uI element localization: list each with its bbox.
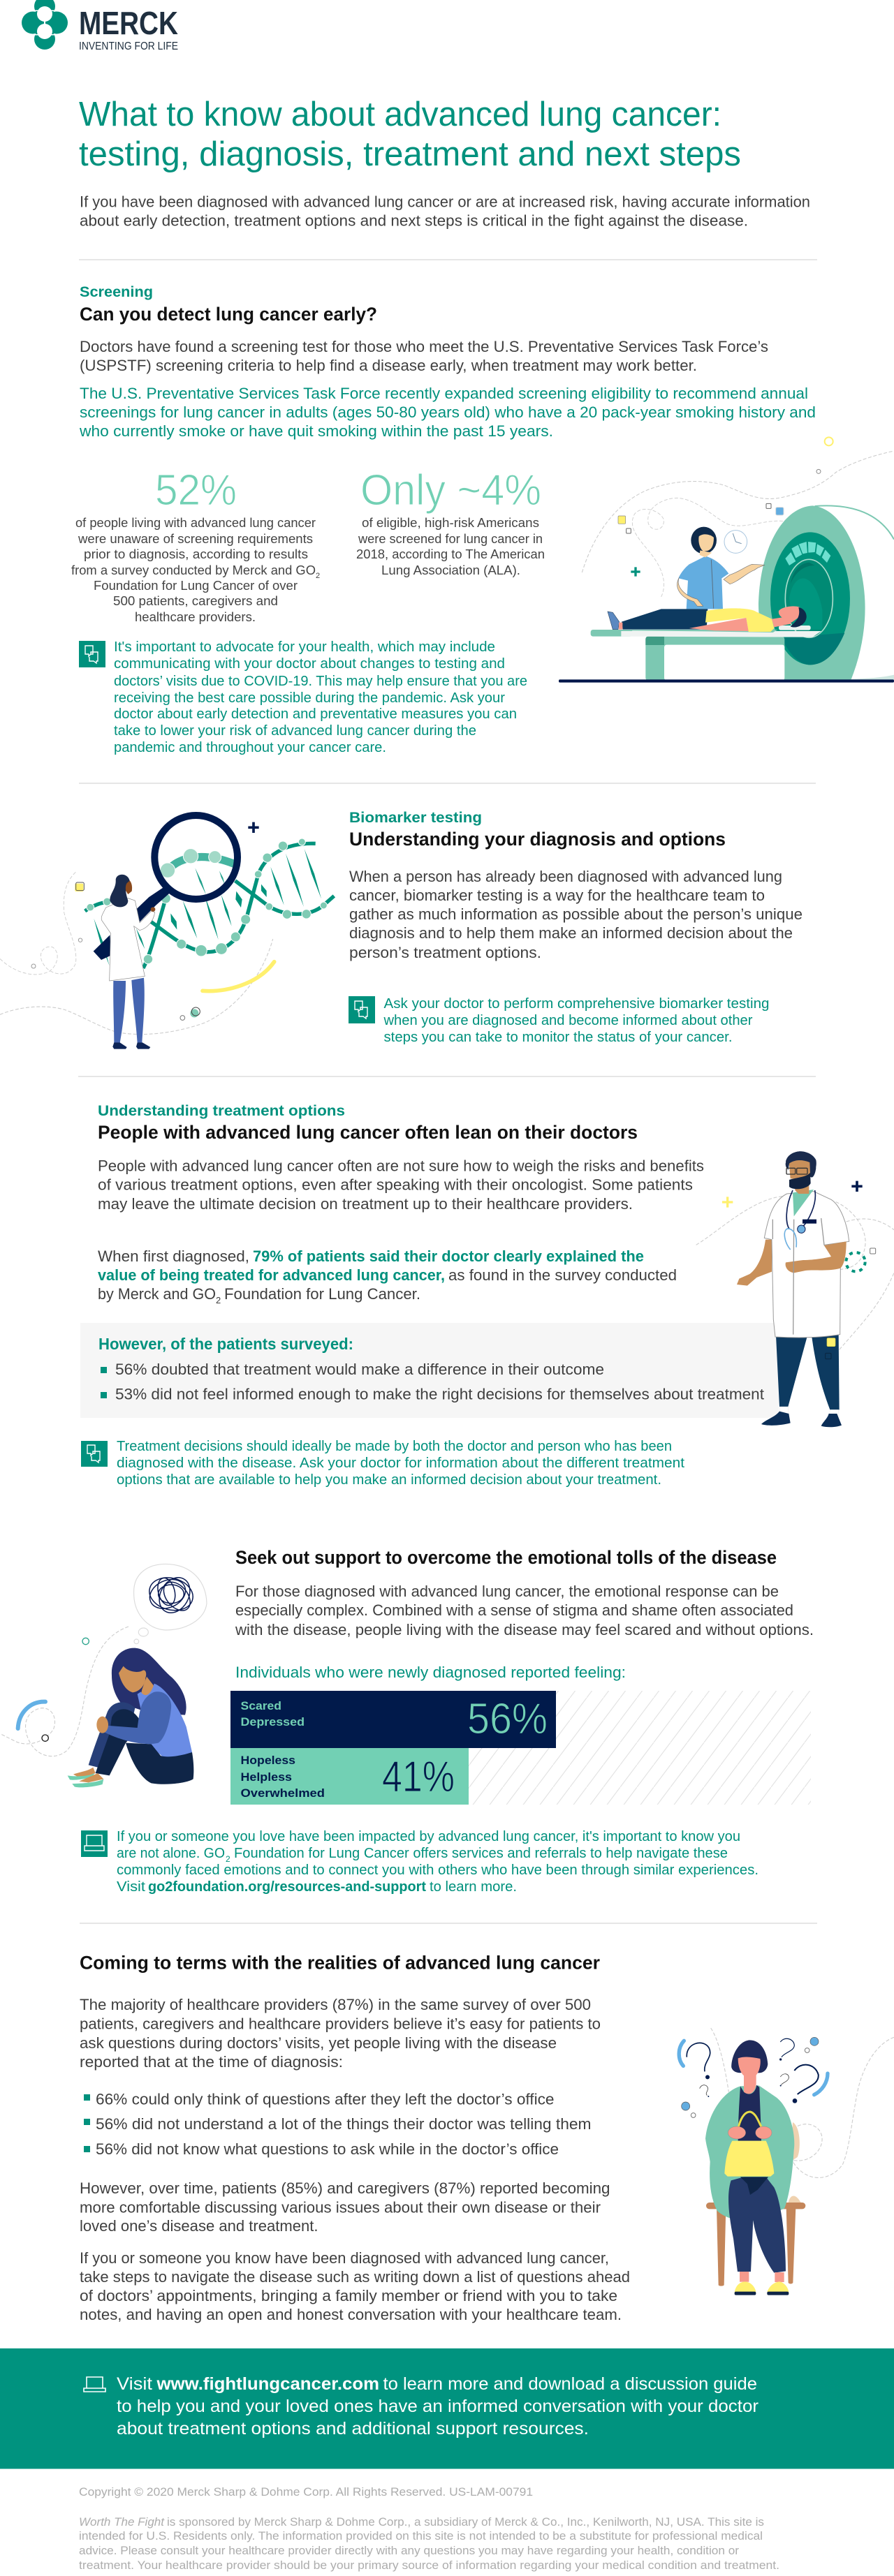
text: majority of providers: ask questions during doctors’ visits, yet people living with the disease [80,2034,557,2052]
section label: screening: Screening [80,284,153,300]
icon: laptop [81,1830,108,1857]
text: banner message [117,2374,759,2438]
heading: can you detect: Can you detect lung cancer early? [80,304,377,325]
text: 79% of patients: 79% of patients said their doctor clearly explained the [253,1248,644,1265]
callout: advocate for your health: pandemic and throughout your cancer care. [114,740,386,755]
stat: 52%: prior to diagnosis, according to results [84,547,308,561]
callout: advocate for your health: communicating with your doctor about changes to testing and [114,656,505,672]
bullet list: questions [84,2090,591,2158]
icon: laptop [84,2377,105,2392]
text: USPSTF eligibility: The U.S. Preventative Services Task Force recently expanded screening eligibility to recommend annual [80,385,808,402]
text: weighing risks: People with advanced lung cancer often are not sure how to weigh the risks and benefits [98,1157,704,1174]
bullet list: questions: 56% did not understand a lot of the things their doctor was telling them [96,2115,591,2133]
text: over time: However, over time, patients (85%) and caregivers (87%) reported becoming [80,2179,610,2197]
title [79,96,741,173]
text: emotional response: with the disease, people living with the disease may feel scared and without options. [235,1621,814,1638]
text: emotional response [235,1583,814,1638]
stat: 52%: were unaware of screening requirements [78,532,313,546]
text: weighing risks: may leave the ultimate decision on treatment up to their healthcare providers. [98,1195,633,1213]
callout: you are not alone: Foundation for Lung Cancer offers services and referrals to help navigate these [234,1846,728,1861]
bar: 41%: Overwhelmed [240,1786,325,1800]
title: testing, diagnosis, treatment and next steps [79,135,741,173]
text: banner message: Visit [117,2374,152,2394]
callout: treatment decisions: options that are available to help you make an informed decision about your treatment. [117,1472,661,1488]
text: 79% of patients: by Merck and GO [98,1285,216,1303]
panel: emotional support [81,1547,814,1895]
section label: treatment options: Understanding treatment options [98,1103,345,1119]
callout: you are not alone: go2foundation.org/resources-and-support [148,1879,426,1895]
stat: only ~4%: were screened for lung cancer in [358,532,543,546]
callout: ask your doctor: when you are diagnosed and become informed about other [383,1013,753,1028]
icon: chat bubbles [79,641,105,667]
panel: treatment options [80,1103,894,1488]
stat: 52%: 2 [316,572,320,580]
icon: chat bubbles [349,996,375,1023]
bar: 56% [230,1691,556,1748]
bullet: 53% not informed: 53% did not feel informed enough to make the right decisions for themselves about treatment [115,1385,764,1403]
callout: advocate for your health: doctors’ visits due to COVID-19. This may help ensure that you are [114,674,527,689]
logo: Merck Inventing for Life: MERCK [79,5,178,41]
text: banner message: www.fightlungcancer.com [156,2374,379,2394]
callout: advocate for your health: take to lower your risk of advanced lung cancer during the [114,723,476,739]
text: take steps [80,2249,630,2323]
panel: coming to terms [80,1952,894,2323]
callout: you are not alone: commonly faced emotions and to connect you with others who have been through similar experiences. [117,1863,759,1878]
text: banner message: to learn more and download a discussion guide [383,2374,757,2394]
text: USPSTF eligibility [79,385,816,440]
panel: biomarker testing [349,810,803,1045]
text: over time: more comfortable discussing various issues about their own disease or their [80,2199,601,2216]
callout: you are not alone: Visit [117,1879,145,1895]
text: screening test [80,338,768,374]
illustration: woman hugging knees with thought bubble [0,1564,207,1787]
text: USPSTF eligibility: screenings for lung cancer in adults (ages 50-80 years old) who have a 20 pack-year smoking history and [80,404,816,421]
logo: Merck Inventing for Life: INVENTING FOR LIFE [79,40,178,52]
bullet list: questions: 66% could only think of questions after they left the doctor’s office [96,2090,555,2108]
footer: copyright and legal: Copyright © 2020 Merck Sharp & Dohme Corp. All Rights Reserved. US-LAM-00791 [79,2485,533,2499]
illustration: MRI scan with nurse and patient [559,437,894,683]
callout box: patients surveyed [80,1323,779,1418]
logo: Merck Inventing for Life [22,0,178,52]
heading: coming to terms: Coming to terms with the realities of advanced lung cancer [80,1952,600,1973]
text: biomarker description: person’s treatment options. [349,944,541,961]
text: majority of providers [80,1996,601,2071]
section label: biomarker: Biomarker testing [349,810,482,826]
text: over time: loved one’s disease and treatment. [80,2217,318,2235]
callout: you are not alone: are not alone. GO [117,1846,225,1861]
illustration: seated woman with handbag and question marks [679,2028,894,2295]
stat: only ~4%: Only ~4% [360,466,541,515]
footer: copyright and legal: is sponsored by Merck Sharp & Dohme Corp., a subsidiary of Merck & Co., Inc., Kenilworth, NJ, USA. This site is [167,2515,764,2529]
callout: advocate for your health: It's important to advocate for your health, which may include [114,639,495,655]
text: biomarker description: cancer, biomarker testing is a way for the healthcare team to [349,887,765,904]
text: 79% of patients: value of being treated for advanced lung cancer, [98,1266,445,1284]
bar: 41%: Hopeless [240,1754,295,1767]
footer: copyright and legal: advice. Please consult your healthcare provider directly with any questions you may have regarding your health, condition or [79,2544,739,2557]
callout: advocate for your health: receiving the best care possible during the pandemic. Ask your [114,690,505,706]
text: screening test: Doctors have found a screening test for those who meet the U.S. Preventative Services Task Force’s [80,338,768,355]
bar: 41%: 41% [382,1753,455,1801]
callout: ask your doctor: steps you can take to monitor the status of your cancer. [384,1030,732,1045]
bar: 56%: 56% [467,1695,548,1743]
text: majority of providers: patients, caregivers and healthcare providers believe it’s easy for patients to [80,2015,601,2033]
callout: you are not alone: to learn more. [430,1879,517,1895]
callout: treatment decisions: Treatment decisions should ideally be made by both the doctor and person who has been [117,1439,672,1454]
banner: visit fightlungcancer.com [0,2348,894,2468]
text: 79% of patients: Foundation for Lung Cancer. [224,1285,420,1303]
illustration: scientist with magnifier and DNA [0,815,334,1049]
icon: chat bubbles [81,1441,108,1467]
callout: treatment decisions [117,1439,684,1488]
callout: you are not alone: 2 [226,1854,230,1864]
stat: 52%: from a survey conducted by Merck and GO [71,563,316,577]
callout: ask your doctor: Ask your doctor to perform comprehensive biomarker testing [384,996,770,1012]
callout: advocate for your health: doctor about early detection and preventative measures you can [114,706,517,722]
stat: only ~4%: Lung Association (ALA). [381,563,520,577]
footer: copyright and legal [79,2485,779,2572]
text: emotional response: especially complex. Combined with a sense of stigma and shame often associated [235,1601,793,1619]
text: majority of providers: The majority of healthcare providers (87%) in the same survey of over 500 [80,1996,591,2013]
text: weighing risks [98,1157,704,1213]
heading: understanding your diagnosis: Understanding your diagnosis and options [349,829,726,850]
text: USPSTF eligibility: who currently smoke or have quit smoking within the past 15 years. [79,422,553,440]
bar chart: reported feelings [230,1691,811,1805]
title: What to know about advanced lung cancer: [79,96,721,133]
text: biomarker description: When a person has already been diagnosed with advanced lung [349,868,782,885]
text: weighing risks: of various treatment options, even after speaking with their oncologist. Some patients [98,1176,693,1194]
bullet: 56% doubted: 56% doubted that treatment would make a difference in their outcome [115,1361,604,1378]
text: biomarker description: gather as much information as possible about the person’s unique [349,905,803,923]
bar: 56%: Scared [240,1699,281,1712]
stat: only ~4% [356,466,545,577]
intro text: about early detection, treatment options and next steps is critical in the fight against the disease. [80,212,748,229]
text: banner message: to help you and your loved ones have an informed conversation with your doctor [117,2397,759,2416]
text: biomarker description [349,868,803,961]
text: take steps: If you or someone you know have been diagnosed with advanced lung cancer, [80,2249,609,2267]
stat: 52%: 52% [155,466,237,515]
stat: 52%: healthcare providers. [135,610,256,624]
stat: only ~4%: 2018, according to The American [356,547,545,561]
callout: advocate for your health [114,639,527,755]
footer: copyright and legal: Worth The Fight [79,2515,165,2529]
text: 79% of patients: 2 [216,1295,221,1305]
heading: seek out support: Seek out support to overcome the emotional tolls of the disease [235,1547,777,1568]
bullet list: questions: 56% did not know what questions to ask while in the doctor’s office [96,2140,559,2158]
footer: copyright and legal: intended for U.S. Residents only. The information provided on this site is not intended to be a substitute for professional medical [79,2529,763,2542]
callout: you are not alone [117,1829,759,1895]
callout: treatment decisions: diagnosed with the disease. Ask your doctor for information about the different treatment [117,1456,684,1471]
stat: only ~4%: of eligible, high-risk Americans [362,516,539,530]
text: take steps: take steps to navigate the disease such as writing down a list of questions ahead [80,2268,630,2286]
chart heading: newly diagnosed: Individuals who were newly diagnosed reported feeling: [235,1664,626,1681]
callout: ask your doctor [383,996,770,1045]
text: majority of providers: reported that at the time of diagnosis: [80,2053,343,2071]
text: biomarker description: diagnosis and to help them make an informed decision about the [349,924,793,942]
text: 79% of patients: as found in the survey conducted [448,1266,677,1284]
panel: screening [71,284,894,755]
bar: 41% [230,1748,469,1805]
text: emotional response: For those diagnosed with advanced lung cancer, the emotional response can be [235,1583,779,1600]
stat: 52% [71,466,320,624]
heading: lean on doctors: People with advanced lung cancer often lean on their doctors [98,1122,638,1143]
text: screening test: (USPSTF) screening criteria to help find a disease early, when treatment may work better. [80,357,697,374]
stat: 52%: 500 patients, caregivers and [113,594,278,608]
bar: 41%: Helpless [240,1770,292,1784]
heading: however: However, of the patients surveyed: [98,1335,353,1353]
text: banner message: about treatment options and additional support resources. [117,2419,589,2438]
illustration: doctor with stethoscope [696,1151,894,1427]
intro text: If you have been diagnosed with advanced lung cancer or are at increased risk, having accurate information [80,193,810,211]
stat: 52%: of people living with advanced lung cancer [75,516,316,530]
footer: copyright and legal: treatment. Your healthcare provider should be your primary source of information regarding your medical condition and treatment. [79,2559,779,2572]
stat: 52%: Foundation for Lung Cancer of over [94,579,298,593]
text: 79% of patients: When first diagnosed, [98,1248,249,1265]
text: take steps: of doctors’ appointments, bringing a family member or friend with you to take [80,2287,617,2304]
intro text [80,193,810,229]
text: take steps: notes, and having an open and honest conversation with your healthcare team. [80,2306,622,2323]
text: 79% of patients [98,1248,677,1305]
text: over time [80,2179,610,2235]
bar: 56%: Depressed [240,1715,305,1729]
callout: you are not alone: If you or someone you love have been impacted by advanced lung cancer, it's important to know you [117,1829,740,1844]
